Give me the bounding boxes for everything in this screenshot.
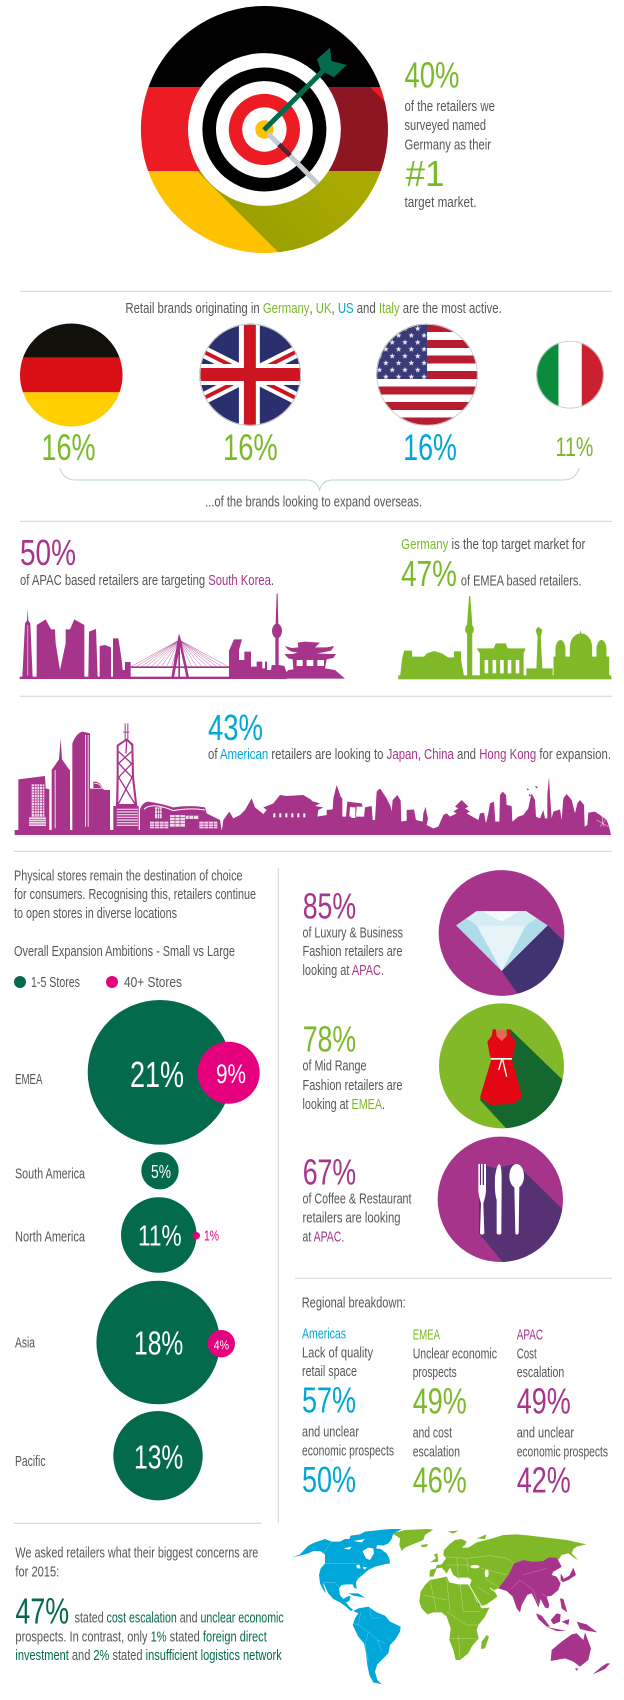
- icon: Italian flag: [536, 340, 605, 410]
- panel: regional breakdown: [302, 1295, 608, 1501]
- icon: diamond: [438, 870, 564, 996]
- panel: expansion ambitions: [14, 868, 260, 1500]
- text: concerns detail: investment and 2% stated insufficient logistics network: [15, 1647, 282, 1664]
- column: Americas: retail space: [302, 1363, 357, 1380]
- text: coffee and restaurant: of Coffee & Restaurant: [302, 1190, 412, 1207]
- row: Pacific: 13%: [134, 1438, 183, 1475]
- caption: of the brands: ...of the brands looking to expand overseas.: [205, 494, 422, 511]
- text: mid range fashion: looking at EMEA.: [302, 1096, 385, 1113]
- row: North America: [15, 1197, 219, 1273]
- text: physical stores intro: for consumers. Recognising this, retailers continue: [14, 886, 256, 903]
- text: American retailers looking to Asia: of American retailers are looking to Japan, China and Hong Kong for expansion.: [208, 746, 611, 763]
- text: Germany top target: Germany is the top target market for: [401, 536, 585, 553]
- column: APAC: 49%: [517, 1380, 571, 1421]
- row: South America: [15, 1152, 179, 1189]
- column: APAC: Cost: [517, 1345, 537, 1362]
- column: EMEA: [413, 1326, 497, 1501]
- legend: 40+ Stores: [124, 974, 182, 991]
- column: Americas: [302, 1325, 394, 1500]
- text: retailers surveyed: of the retailers we: [404, 98, 495, 115]
- icon: cutlery: [438, 1137, 567, 1267]
- panel: Germany top target for EMEA: [398, 536, 611, 679]
- stat: Italy 11%: 11%: [555, 432, 593, 462]
- stat: US 16%: 16%: [403, 427, 457, 468]
- heading: overall expansion ambitions: Overall Expansion Ambitions - Small vs Large: [14, 943, 235, 960]
- text: EMEA retailers: of EMEA based retailers.: [461, 573, 581, 590]
- icon: Germany flag target with dart: [140, 0, 400, 256]
- row: North America: 11%: [138, 1221, 182, 1253]
- row: EMEA: 21%: [130, 1054, 184, 1095]
- panel: mid range fashion: [302, 1003, 564, 1128]
- illustration: world map: [293, 1529, 610, 1684]
- legend: [14, 974, 182, 991]
- column: EMEA: escalation: [413, 1444, 460, 1461]
- text: luxury fashion: looking at APAC.: [302, 962, 384, 979]
- text: retailers surveyed: surveyed named: [404, 117, 486, 134]
- stat: 47%: 47%: [401, 553, 457, 594]
- stat: UK 16%: 16%: [223, 427, 278, 468]
- text: concerns question: for 2015:: [15, 1564, 59, 1581]
- text: concerns detail: [15, 1610, 284, 1664]
- row: North America: North America: [15, 1229, 85, 1246]
- row: South America: South America: [15, 1165, 85, 1182]
- text: concerns detail: prospects. In contrast, only 1% stated foreign direct: [15, 1629, 267, 1646]
- panel: biggest concerns: [15, 1545, 284, 1664]
- panel: South Korea: [20, 532, 345, 679]
- text: coffee and restaurant: [302, 1190, 412, 1246]
- text: mid range fashion: [302, 1058, 402, 1113]
- panel: most active brand origins: [19, 300, 605, 511]
- icon: US flag: [375, 323, 479, 427]
- stat: 67%: 67%: [303, 1151, 356, 1192]
- panel: American retailers: [15, 707, 611, 835]
- column: APAC: APAC: [517, 1326, 543, 1343]
- column: EMEA: 46%: [413, 1460, 467, 1501]
- icon: dress: [439, 1003, 564, 1128]
- stat: 43%: 43%: [208, 707, 263, 748]
- region: APAC: [498, 1557, 610, 1674]
- icon: German flag: [19, 323, 124, 427]
- column: Americas: 50%: [302, 1459, 356, 1500]
- illustration: Seoul skyline: [20, 593, 345, 679]
- stat: 85%: 85%: [303, 886, 356, 926]
- column: EMEA: prospects: [413, 1364, 457, 1381]
- brace: [60, 468, 579, 490]
- panel: coffee and restaurant: [302, 1137, 567, 1267]
- column: Americas: Americas: [302, 1325, 346, 1342]
- row: Asia: [15, 1281, 235, 1404]
- column: EMEA: Unclear economic: [413, 1345, 497, 1362]
- stat: 47%: 47%: [15, 1590, 69, 1631]
- column: EMEA: EMEA: [413, 1326, 440, 1343]
- stat: #1: #1: [406, 153, 444, 194]
- text: coffee and restaurant: retailers are looking: [302, 1210, 400, 1227]
- legend: 1-5 Stores: [31, 974, 80, 991]
- column: EMEA: 49%: [413, 1380, 467, 1421]
- panel: luxury and business fashion: [302, 870, 564, 996]
- text: physical stores intro: [14, 868, 256, 922]
- text: luxury fashion: Fashion retailers are: [302, 943, 402, 960]
- illustration: Berlin skyline: [398, 596, 611, 679]
- panel: Germany target market: [140, 0, 495, 256]
- column: EMEA: and cost: [413, 1425, 453, 1442]
- row: North America: 1%: [204, 1228, 219, 1245]
- row: Pacific: Pacific: [15, 1453, 46, 1470]
- column: Americas: Lack of quality: [302, 1344, 373, 1361]
- row: EMEA: 9%: [216, 1059, 246, 1089]
- column: APAC: and unclear: [517, 1425, 574, 1442]
- text: target market: target market.: [404, 194, 476, 211]
- text: physical stores intro: Physical stores remain the destination of choice: [14, 868, 242, 885]
- text: luxury fashion: of Luxury & Business: [302, 924, 403, 941]
- stat: 40%: 40%: [404, 54, 460, 96]
- row: Asia: 18%: [134, 1324, 183, 1361]
- text: mid range fashion: of Mid Range: [302, 1058, 366, 1075]
- heading: most active origins: Retail brands originating in Germany, UK, US and Italy are the most active.: [125, 300, 502, 317]
- heading: regional breakdown: Regional breakdown:: [302, 1295, 406, 1312]
- text: concerns question: We asked retailers what their biggest concerns are: [15, 1545, 258, 1562]
- text: physical stores intro: to open stores in diverse locations: [14, 905, 177, 922]
- row: EMEA: EMEA: [15, 1071, 42, 1088]
- stat: 78%: 78%: [303, 1019, 356, 1060]
- row: EMEA: [15, 1000, 260, 1145]
- column: Americas: 57%: [302, 1380, 356, 1421]
- region: EMEA: [393, 1529, 587, 1660]
- text: retailers surveyed: Germany as their: [404, 136, 491, 154]
- illustration: Asian skyline: [15, 723, 611, 835]
- column: APAC: 42%: [517, 1460, 571, 1501]
- stat: Germany 16%: 16%: [41, 427, 96, 468]
- text: retailers surveyed: [404, 98, 495, 154]
- row: Asia: Asia: [15, 1335, 35, 1352]
- region: Americas: [293, 1529, 402, 1684]
- row: Asia: 4%: [214, 1338, 229, 1352]
- text: concerns question: [15, 1545, 258, 1581]
- text: concerns detail: stated cost escalation and unclear economic: [75, 1610, 284, 1627]
- column: Americas: and unclear: [302, 1424, 359, 1441]
- row: Pacific: [15, 1411, 203, 1500]
- text: APAC retailers: of APAC based retailers are targeting South Korea.: [20, 572, 274, 589]
- text: luxury fashion: [302, 924, 403, 979]
- column: APAC: [517, 1326, 608, 1501]
- column: APAC: escalation: [517, 1364, 564, 1381]
- stat: 50%: 50%: [20, 532, 76, 573]
- text: mid range fashion: Fashion retailers are: [302, 1077, 402, 1094]
- row: South America: 5%: [151, 1162, 171, 1182]
- text: coffee and restaurant: at APAC.: [302, 1229, 344, 1246]
- column: Americas: economic prospects: [302, 1442, 394, 1459]
- icon: UK flag: [200, 324, 302, 426]
